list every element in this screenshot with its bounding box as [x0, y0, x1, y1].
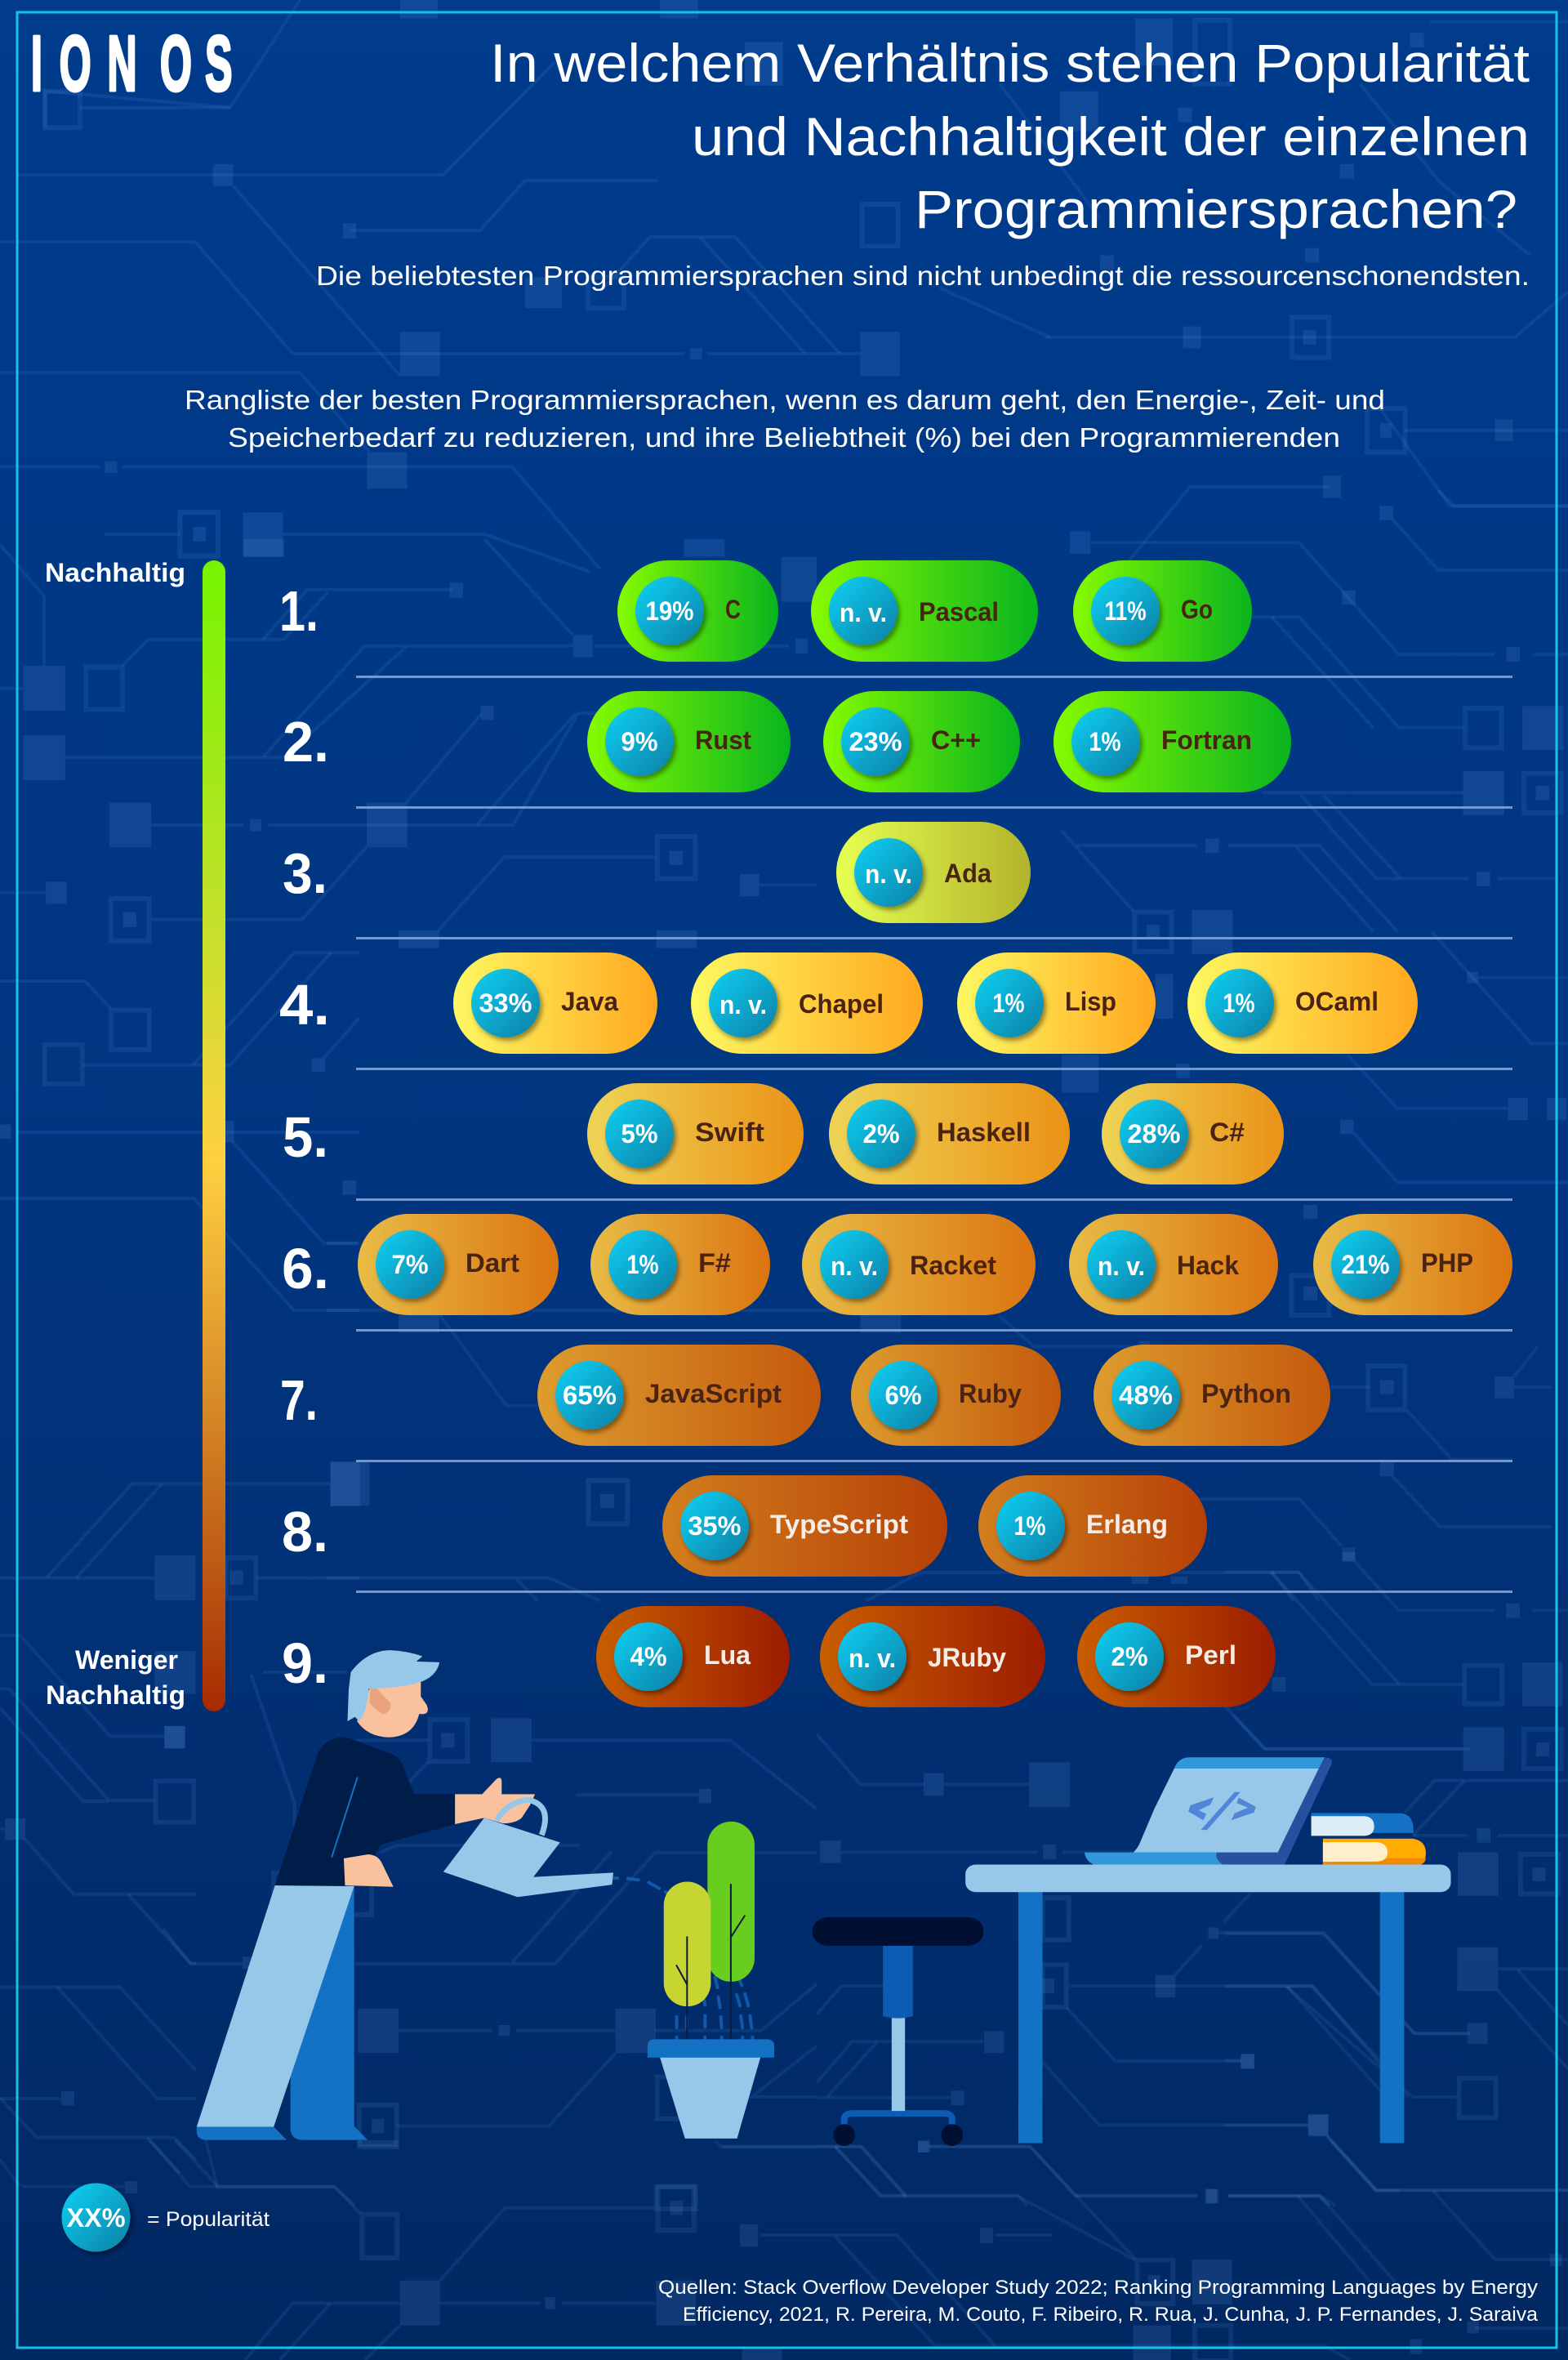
chart description: [185, 385, 1385, 453]
pill: PHP: PHP: [1421, 1248, 1473, 1278]
pill: Fortran: [1054, 691, 1291, 792]
pill: JRuby: [820, 1606, 1045, 1707]
rank numbers: 1.: [279, 579, 318, 643]
pill: Erlang: 1%: [1014, 1511, 1045, 1541]
pill: Lua: [596, 1606, 790, 1707]
pill: Pascal: n. v.: [840, 598, 887, 627]
pill: TypeScript: [662, 1475, 947, 1577]
pill: Go: Go: [1181, 595, 1213, 624]
pill: OCaml: 1%: [1223, 988, 1254, 1018]
pill: Python: [1094, 1345, 1330, 1446]
pill: Java: [453, 952, 657, 1054]
person: ear: [370, 1689, 390, 1714]
illustration: person watering plants: [197, 1650, 774, 2140]
pill: C: 19%: [645, 596, 694, 626]
pill: Rust: 9%: [621, 727, 658, 756]
pill: Pascal: [811, 560, 1038, 662]
person: front leg: [197, 1885, 354, 2127]
person: face: [357, 1681, 428, 1738]
pill: OCaml: OCaml: [1295, 987, 1379, 1016]
pill: C++: [823, 691, 1020, 792]
illustration: stool and desk: [813, 1757, 1451, 2146]
pill: Erlang: [978, 1475, 1207, 1577]
pill: F#: F#: [698, 1248, 731, 1278]
pill: C++: 23%: [849, 727, 902, 756]
rank numbers: 9.: [282, 1631, 328, 1695]
legend: [62, 2183, 270, 2251]
person: forearm and hand: [455, 1778, 535, 1824]
pill: Hack: [1069, 1214, 1278, 1315]
pill: Swift: [587, 1083, 804, 1184]
pill: Swift: 5%: [621, 1119, 658, 1149]
pill: Ada: n. v.: [865, 859, 912, 889]
pill: Fortran: 1%: [1089, 727, 1120, 756]
pill: Racket: n. v.: [831, 1251, 878, 1281]
desk: [965, 1865, 1451, 2144]
chart description: Rangliste der besten Programmiersprachen, wenn es darum geht, den Energie-, Zeit- und: [185, 385, 1385, 415]
scale label: top: Nachhaltig: [45, 558, 185, 587]
pill: PHP: 21%: [1341, 1250, 1390, 1279]
person: sleeve crease: [332, 1777, 358, 1858]
pill: Java: Java: [561, 987, 618, 1016]
pill: Go: 11%: [1104, 596, 1147, 626]
pill: Rust: [587, 691, 791, 792]
pill: Ada: [836, 822, 1031, 923]
pill: Ruby: Ruby: [959, 1379, 1022, 1408]
pill: JavaScript: [537, 1345, 821, 1446]
pill: F#: [590, 1214, 770, 1315]
pill: Rust: Rust: [695, 725, 751, 755]
person: hair: [348, 1650, 439, 1721]
pill: F#: 1%: [627, 1250, 658, 1279]
pill: Ruby: [851, 1345, 1061, 1446]
plant: tall green: [707, 1822, 755, 2039]
laptop: [1085, 1757, 1332, 1865]
title: In welchem Verhältnis stehen Popularität: [490, 33, 1530, 93]
pill: Lisp: 1%: [993, 988, 1024, 1018]
water drops: [614, 1878, 752, 2039]
pill: JavaScript: JavaScript: [645, 1379, 782, 1408]
pill: Lua: Lua: [704, 1640, 751, 1670]
watering can: [443, 1800, 613, 1897]
pill: Lisp: [957, 952, 1156, 1054]
pill: Haskell: [829, 1083, 1070, 1184]
books: [1312, 1813, 1426, 1865]
pill: Ada: Ada: [944, 859, 991, 888]
pill: Ruby: 6%: [885, 1381, 921, 1410]
person: back leg: [291, 1885, 368, 2140]
pill: C#: C#: [1209, 1118, 1245, 1147]
pill: Pascal: Pascal: [919, 597, 999, 627]
pill: JRuby: n. v.: [849, 1644, 896, 1673]
pill: Hack: Hack: [1177, 1251, 1239, 1280]
rank numbers: 7.: [280, 1368, 318, 1432]
title: und Nachhaltigkeit der einzelnen: [692, 106, 1530, 167]
pill: C: C: [725, 595, 741, 624]
person: lower hand: [344, 1854, 394, 1887]
legend: XX%: [67, 2203, 126, 2233]
pill: OCaml: [1187, 952, 1418, 1054]
pill: TypeScript: 35%: [688, 1511, 742, 1541]
scale label: bottom: Weniger: [75, 1645, 178, 1675]
icon: code brackets: [1188, 1792, 1256, 1830]
pill: Lisp: Lisp: [1065, 987, 1116, 1016]
pill: Perl: [1077, 1606, 1276, 1707]
pill: C: [617, 560, 778, 662]
subtitle: Die beliebtesten Programmiersprachen sind nicht unbedingt die ressourcenschonendsten.: [316, 261, 1530, 291]
sustainability scale bar: [203, 560, 225, 1711]
pill: Java: 33%: [479, 988, 532, 1018]
pill: C#: 28%: [1127, 1119, 1181, 1149]
title: Programmiersprachen?: [915, 179, 1517, 239]
pill: C++: C++: [931, 725, 981, 755]
pill: Lua: 4%: [630, 1642, 666, 1671]
chart description: Speicherbedarf zu reduzieren, und ihre Beliebtheit (%) bei den Programmierenden: [228, 422, 1340, 453]
sources: [658, 2277, 1539, 2326]
pill: PHP: [1313, 1214, 1512, 1315]
pill: Dart: Dart: [466, 1248, 519, 1278]
pill: Perl: 2%: [1111, 1642, 1148, 1671]
rank numbers: [279, 579, 330, 1695]
pill: TypeScript: TypeScript: [770, 1510, 908, 1539]
pill: Chapel: Chapel: [799, 989, 884, 1019]
rank numbers: 3.: [283, 841, 327, 905]
scale label: bottom: Nachhaltig: [46, 1680, 185, 1710]
pill: Python: Python: [1201, 1379, 1291, 1408]
title: [490, 33, 1530, 239]
pill: Chapel: n. v.: [719, 990, 767, 1019]
pill: Hack: n. v.: [1098, 1251, 1145, 1281]
pill: Perl: Perl: [1185, 1640, 1236, 1670]
person: shoe: [197, 2127, 287, 2140]
rank numbers: 4.: [279, 973, 330, 1037]
pill: Haskell: Haskell: [937, 1118, 1031, 1147]
pill: JavaScript: 65%: [563, 1381, 617, 1410]
pill: Racket: Racket: [910, 1251, 996, 1280]
pill: Go: [1073, 560, 1252, 662]
legend: = Popularität: [147, 2208, 270, 2231]
rank numbers: 5.: [283, 1105, 328, 1169]
row dividers: [356, 676, 1512, 1593]
pill: Racket: [802, 1214, 1036, 1315]
scale label: bottom: [46, 1645, 185, 1710]
pill: Erlang: Erlang: [1086, 1510, 1168, 1539]
plant: short yellow-green: [664, 1882, 710, 2039]
pill: Fortran: Fortran: [1161, 725, 1252, 755]
pill: C#: [1102, 1083, 1284, 1184]
sources: Efficiency, 2021, R. Pereira, M. Couto, F. Ribeiro, R. Rua, J. Cunha, J. P. Fernandes, J. Saraiva: [683, 2304, 1539, 2326]
person: torso: [275, 1737, 455, 1886]
logo: IONOS: IONOS: [31, 20, 232, 108]
flower pot: [648, 2039, 774, 2139]
pill: Chapel: [691, 952, 923, 1054]
pill: Python: 48%: [1119, 1381, 1173, 1410]
pill: Swift: Swift: [695, 1118, 764, 1147]
rank numbers: 2.: [283, 710, 329, 774]
pill: Dart: [358, 1214, 559, 1315]
stool: [813, 1917, 983, 2146]
pill: Haskell: 2%: [862, 1119, 900, 1149]
pill: JRuby: JRuby: [928, 1643, 1006, 1672]
rank numbers: 8.: [282, 1500, 328, 1564]
pill: Dart: 7%: [392, 1250, 428, 1279]
sources: Quellen: Stack Overflow Developer Study 2022; Ranking Programming Languages by Energy: [658, 2277, 1538, 2299]
rank numbers: 6.: [282, 1237, 329, 1300]
